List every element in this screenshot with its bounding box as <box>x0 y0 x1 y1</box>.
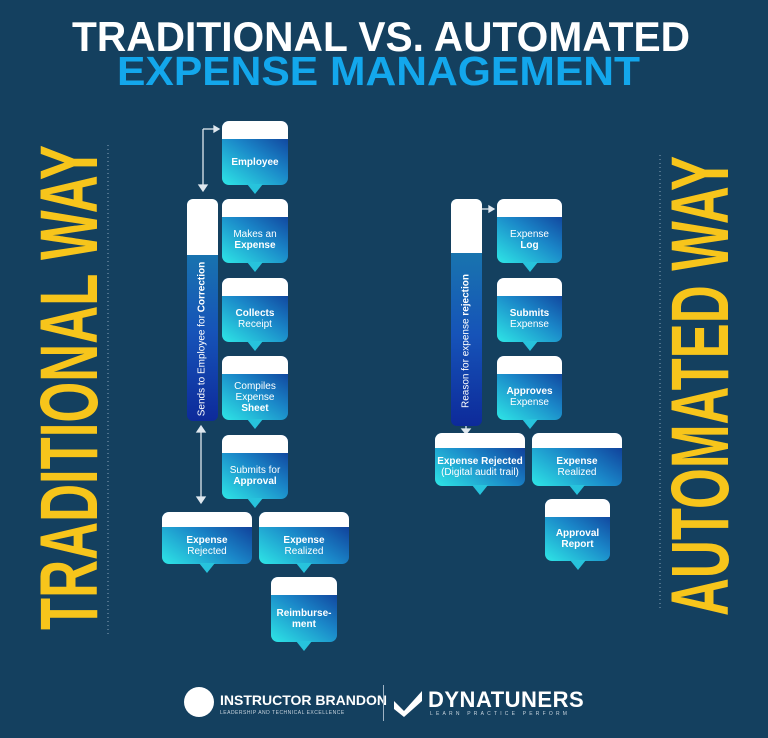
box: employee: Employee <box>231 156 279 168</box>
box: approves expense <box>497 356 562 420</box>
box: approval report: Report <box>561 539 594 550</box>
box: expense realized: Realized <box>285 546 323 556</box>
box: reimbursement: Reimburse- <box>276 608 332 618</box>
box: compiles expense sheet: Compiles <box>234 380 276 392</box>
box: approves expense: Expense <box>510 397 549 408</box>
box: expense rejected digital audit trail: Expense Rejected <box>437 456 523 467</box>
box: submits expense: Submits <box>510 308 549 319</box>
box: submits for approval: Submits for <box>230 465 280 476</box>
bar: reason for expense rejection <box>451 199 482 426</box>
box: collects receipt: Collects <box>236 308 274 319</box>
box: expense log <box>497 199 562 263</box>
box: collects receipt: Receipt <box>238 319 272 330</box>
box: employee <box>222 121 288 185</box>
box: expense rejected <box>162 512 252 564</box>
arrows <box>197 126 494 503</box>
bar: sends to employee for correction <box>187 199 218 421</box>
box: expense rejected digital audit trail: (Digital audit trail) <box>441 467 519 478</box>
box: makes an expense: Expense <box>234 240 276 251</box>
box: approval report <box>545 499 610 561</box>
box: approval report: Approval <box>556 528 599 539</box>
box: expense rejected: Rejected <box>187 546 227 556</box>
box: reimbursement <box>271 577 337 642</box>
box: expense realized: Expense <box>283 534 325 546</box>
title: EXPENSE MANAGEMENT <box>117 48 640 94</box>
icon: instructor brandon <box>184 687 214 717</box>
bar: sends to employee for correction: Sends to Employee for Correction <box>196 262 208 416</box>
box: submits for approval: Approval <box>233 476 277 487</box>
footer logos: LEADERSHIP AND TECHNICAL EXCELLENCE <box>220 710 345 716</box>
text: instructor brandon: INSTRUCTOR BRANDON <box>220 692 387 708</box>
text: dynatuners: DYNATUNERS <box>428 687 584 712</box>
box: expense realized (automated): Realized <box>558 467 596 478</box>
box: collects receipt <box>222 278 288 342</box>
box: compiles expense sheet: Sheet <box>241 402 269 414</box>
box: makes an expense <box>222 199 288 263</box>
title <box>72 13 690 94</box>
box: compiles expense sheet <box>222 356 288 420</box>
bar: reason for expense rejection: Reason for expense rejection <box>460 274 472 408</box>
footer logos: LEARN PRACTICE PERFORM <box>430 711 570 717</box>
box: makes an expense: Makes an <box>233 229 277 240</box>
box: compiles expense sheet: Expense <box>236 392 274 402</box>
box: expense log: Expense <box>510 229 549 240</box>
box: expense realized <box>259 512 349 564</box>
icon: checkmark <box>394 691 422 717</box>
box: expense rejected digital audit trail <box>435 433 525 486</box>
box: expense log: Log <box>520 240 539 251</box>
box: approves expense: Approves <box>506 386 553 397</box>
box: submits expense: Expense <box>510 319 549 330</box>
box: submits for approval <box>222 435 288 499</box>
title: TRADITIONAL VS. AUTOMATED <box>72 13 690 60</box>
box: expense realized (automated): Expense <box>556 456 598 467</box>
box: expense realized (automated) <box>532 433 622 486</box>
box: expense rejected: Expense <box>186 534 228 546</box>
footer logos <box>184 685 584 721</box>
box: submits expense <box>497 278 562 342</box>
box: reimbursement: ment <box>292 618 316 630</box>
